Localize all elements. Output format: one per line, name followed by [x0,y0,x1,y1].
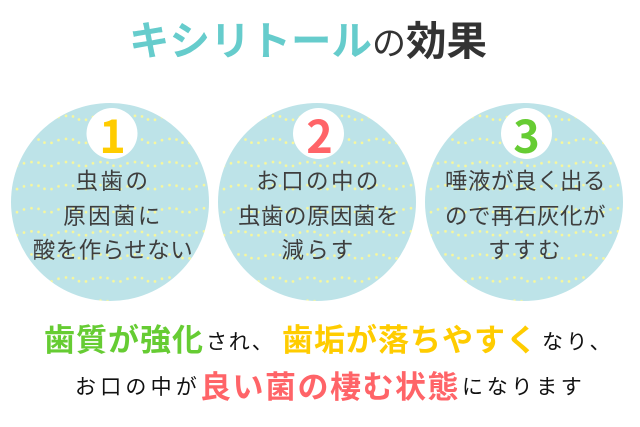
summary line 1: なり、 [542,331,614,354]
text: circle 2: 減らす [281,238,356,263]
text: circle 3 [445,169,606,263]
text: circle 1: 虫歯の [76,169,150,194]
summary line 2: 良い菌の棲む状態 [200,370,460,405]
summary line 1: 歯垢が落ちやすく [282,323,538,358]
summary line 1: され、 [206,331,275,354]
text: circle 1 [33,169,193,263]
text: circle 3: 唾液が良く出る [445,169,606,194]
summary line 2: になります [462,376,586,399]
summary line 2: お口の中が [75,376,201,399]
number 3: 3 [513,101,540,166]
text: circle 3: すすむ [488,238,563,263]
number 2: 2 [306,101,333,166]
text: circle 2: お口の中の [256,169,381,194]
summary line 2 [75,370,586,405]
title: キシリトールの効果 [129,18,487,64]
circle 1 [11,103,209,301]
text: circle 2: 虫歯の原因菌を [238,204,399,228]
text: circle 3: ので再石灰化が [445,204,606,228]
text: circle 1: 酸を作らせない [33,238,193,263]
text: circle 1: 原因菌に [63,204,163,228]
number 1: 1 [99,101,126,166]
circle 2 [218,103,416,301]
summary line 1 [44,323,614,358]
text: circle 2 [238,169,399,263]
summary line 1: 歯質が強化 [44,323,204,358]
circle 3 [425,103,623,301]
